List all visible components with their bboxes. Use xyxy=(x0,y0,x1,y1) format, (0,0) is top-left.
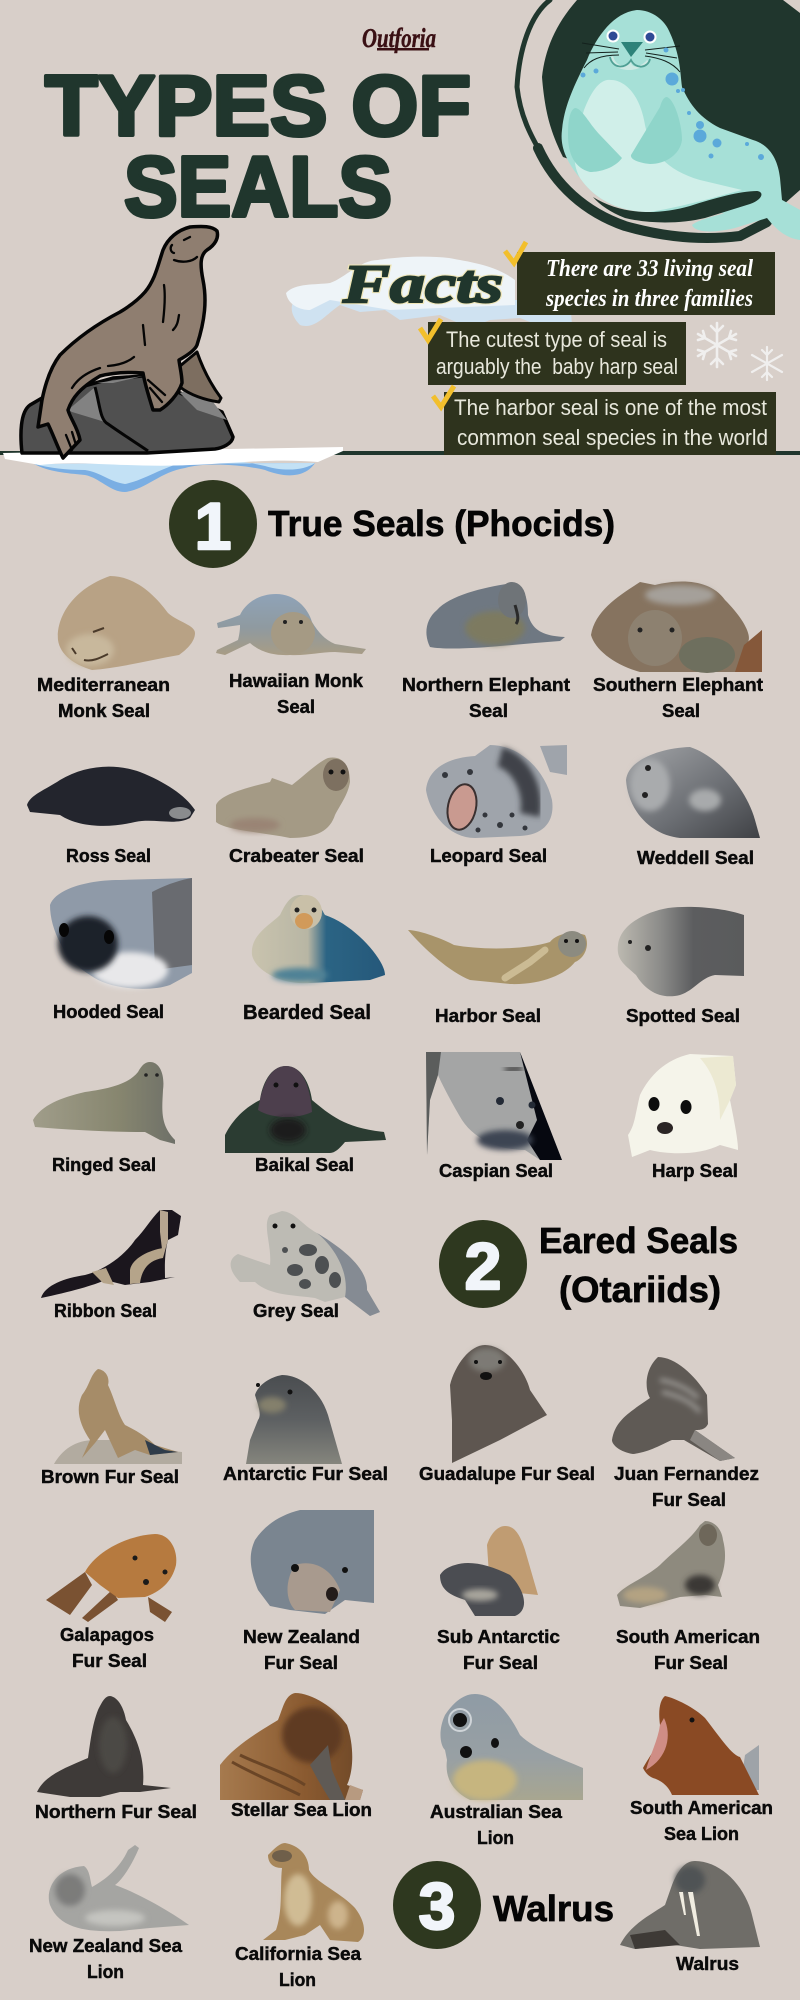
seal card: Ross Seal xyxy=(27,767,195,866)
icon: snowflake large xyxy=(698,323,736,367)
seal card: California Sea Lion xyxy=(235,1843,364,1990)
ice floe xyxy=(3,447,343,492)
back flipper xyxy=(180,352,221,402)
heading: Facts: Facts xyxy=(342,254,503,314)
ground line xyxy=(0,451,800,455)
photo xyxy=(426,745,567,838)
seal card: Galapagos Fur Seal xyxy=(46,1534,176,1671)
number badge: 1 xyxy=(195,489,231,563)
label: Hooded Seal xyxy=(53,1001,164,1022)
photo xyxy=(440,1694,583,1800)
number badge: 2 xyxy=(465,1229,501,1303)
title: TYPES OF xyxy=(45,59,471,154)
label: Ringed Seal xyxy=(52,1154,156,1175)
fact 2: The cutest type of seal is xyxy=(446,327,667,352)
fact 3: common seal species in the world xyxy=(457,425,768,450)
seal card: Harp Seal xyxy=(628,1054,738,1181)
seal card: Brown Fur Seal xyxy=(41,1369,182,1487)
label: Harp Seal xyxy=(652,1160,738,1181)
label xyxy=(60,1624,154,1671)
photo xyxy=(617,1521,725,1608)
label: Seal xyxy=(662,700,700,721)
label: Caspian Seal xyxy=(439,1160,553,1181)
seal belly xyxy=(574,80,742,212)
fact 3 xyxy=(433,386,776,455)
photo xyxy=(216,594,366,655)
fact 2: arguably the baby harp seal xyxy=(436,354,678,379)
number badge: 3 xyxy=(419,1869,455,1943)
label: Stellar Sea Lion xyxy=(231,1799,372,1820)
label: Spotted Seal xyxy=(626,1005,740,1026)
photo xyxy=(628,1054,738,1157)
photo xyxy=(58,576,195,670)
fact 1: There are 33 living seal xyxy=(546,256,753,282)
photo xyxy=(46,1534,176,1622)
seal card: Bearded Seal xyxy=(243,895,385,1024)
seal card: Hawaiian Monk Seal xyxy=(216,594,366,717)
seal card: Antarctic Fur Seal xyxy=(223,1375,388,1484)
check icon xyxy=(420,319,441,340)
label: Juan Fernandez xyxy=(614,1463,759,1484)
label: Seal xyxy=(469,700,508,721)
label: Brown Fur Seal xyxy=(41,1466,179,1487)
seal card: Weddell Seal xyxy=(626,747,760,868)
section heading 1: True Seals: True Seals (Phocids) xyxy=(268,503,615,544)
label xyxy=(430,1801,563,1848)
section heading 2: Eared Seals: (Otariids) xyxy=(559,1269,721,1310)
photo xyxy=(50,878,192,989)
section heading 3: Walrus xyxy=(393,1861,614,1949)
photo xyxy=(626,747,760,838)
section heading 3: Walrus: Walrus xyxy=(493,1888,614,1929)
label: Mediterranean xyxy=(37,674,170,695)
title xyxy=(45,59,471,235)
label: Lion xyxy=(477,1827,514,1848)
photo xyxy=(49,1845,189,1931)
label xyxy=(29,1935,183,1982)
section heading 2: Eared Seals: Eared Seals xyxy=(539,1220,738,1261)
seal card: South American Sea Lion xyxy=(630,1696,773,1844)
photo xyxy=(37,1696,171,1797)
seal card: Guadalupe Fur Seal xyxy=(419,1345,595,1484)
photo xyxy=(220,1693,363,1800)
label: Baikal Seal xyxy=(255,1154,354,1175)
seal card: Hooded Seal xyxy=(50,878,192,1022)
label: New Zealand xyxy=(243,1626,360,1647)
photo xyxy=(620,1861,760,1949)
heading: Facts: Facts xyxy=(342,254,503,314)
label: Australian Sea xyxy=(430,1801,563,1822)
label xyxy=(614,1463,759,1510)
label xyxy=(229,670,364,717)
label: Northern Fur Seal xyxy=(35,1801,197,1822)
photo xyxy=(231,1211,380,1316)
label: Antarctic Fur Seal xyxy=(223,1463,388,1484)
photo xyxy=(216,757,350,838)
label: Fur Seal xyxy=(463,1652,538,1673)
label: Fur Seal xyxy=(654,1652,728,1673)
label: Lion xyxy=(87,1961,124,1982)
label: New Zealand Sea xyxy=(29,1935,183,1956)
label xyxy=(616,1626,760,1673)
label: Weddell Seal xyxy=(637,847,754,868)
title: SEALS xyxy=(124,140,392,235)
photo xyxy=(246,1375,342,1464)
photo xyxy=(643,1696,759,1795)
fact 1: species in three families xyxy=(545,286,753,312)
label: Seal xyxy=(277,696,315,717)
photo xyxy=(618,907,744,996)
label: Monk Seal xyxy=(58,700,150,721)
seal card: Mediterranean Monk Seal xyxy=(37,576,195,721)
photo xyxy=(263,1843,364,1942)
seal card: Baikal Seal xyxy=(225,1066,386,1175)
dark band under belly xyxy=(593,191,761,222)
label: Northern Elephant xyxy=(402,674,570,695)
sea lion details xyxy=(66,237,197,450)
photo xyxy=(440,1526,538,1616)
seal card: Ribbon Seal xyxy=(41,1210,181,1321)
seal card: Stellar Sea Lion xyxy=(220,1693,372,1820)
seal flippers xyxy=(568,97,682,172)
label xyxy=(630,1797,773,1844)
photo xyxy=(591,582,762,673)
label: Galapagos xyxy=(60,1624,154,1645)
fact 2 xyxy=(420,319,686,385)
seal card: Crabeater Seal xyxy=(216,757,364,866)
label: Southern Elephant xyxy=(593,674,763,695)
photo xyxy=(41,1210,181,1298)
seal card: South American Fur Seal xyxy=(616,1521,760,1673)
photo xyxy=(251,1510,374,1614)
label: Sub Antarctic xyxy=(437,1626,560,1647)
check icon xyxy=(433,386,454,407)
label xyxy=(593,674,763,721)
seal spots xyxy=(580,48,764,160)
label: South American xyxy=(616,1626,760,1647)
icon: snowflake small xyxy=(752,347,782,380)
seal card: Southern Elephant Seal xyxy=(591,582,763,721)
label: Ross Seal xyxy=(66,845,151,866)
illustration: teal cartoon seal in dark brush circle xyxy=(517,0,800,240)
rock xyxy=(21,376,233,453)
photo xyxy=(252,895,385,983)
seal card: Leopard Seal xyxy=(426,745,567,866)
label: California Sea xyxy=(235,1943,362,1964)
photo xyxy=(426,582,565,649)
label xyxy=(402,674,570,721)
label: Fur Seal xyxy=(264,1652,338,1673)
logo: Outforia: Outforia xyxy=(362,23,436,53)
seal card: Harbor Seal xyxy=(408,930,587,1026)
seal card: Grey Seal xyxy=(231,1211,380,1321)
label: Ribbon Seal xyxy=(54,1300,157,1321)
photo xyxy=(408,930,587,984)
label: Fur Seal xyxy=(72,1650,147,1671)
number badge xyxy=(393,1861,481,1949)
seal card: New Zealand Fur Seal xyxy=(243,1510,374,1673)
label: Guadalupe Fur Seal xyxy=(419,1463,595,1484)
dark brush circle xyxy=(517,0,800,238)
number badge xyxy=(169,480,257,568)
photo xyxy=(426,1052,562,1160)
seal card: Ringed Seal xyxy=(33,1062,175,1175)
photo xyxy=(27,767,195,826)
seal card: Australian Sea Lion xyxy=(430,1694,583,1848)
check icon xyxy=(505,242,526,263)
label xyxy=(235,1943,362,1990)
seal card: Sub Antarctic Fur Seal xyxy=(437,1526,560,1673)
label: Harbor Seal xyxy=(435,1005,541,1026)
illustration: brown sea lion on rock and ice xyxy=(3,226,343,492)
label: Walrus xyxy=(676,1953,739,1974)
seal card: Northern Elephant Seal xyxy=(402,582,570,721)
label xyxy=(37,674,170,721)
label: Hawaiian Monk xyxy=(229,670,364,691)
label xyxy=(243,1626,360,1673)
photo xyxy=(612,1357,735,1461)
seal card: Spotted Seal xyxy=(618,907,744,1026)
number badge xyxy=(439,1220,527,1308)
label: Bearded Seal xyxy=(243,1002,371,1024)
sea lion body xyxy=(38,226,218,458)
seal card: New Zealand Sea Lion xyxy=(29,1845,189,1982)
label: Lion xyxy=(279,1969,316,1990)
photo xyxy=(450,1345,547,1463)
photo xyxy=(54,1369,182,1464)
fact 1 xyxy=(505,242,775,315)
seal card: Juan Fernandez Fur Seal xyxy=(612,1357,759,1510)
section heading 1: True Seals xyxy=(169,480,615,568)
seal card: Northern Fur Seal xyxy=(35,1696,197,1822)
photo xyxy=(33,1062,175,1144)
snow cloud behind Facts xyxy=(286,257,572,328)
label: Sea Lion xyxy=(664,1823,739,1844)
seal card: Caspian Seal xyxy=(426,1052,562,1181)
label: Crabeater Seal xyxy=(229,845,364,866)
seal face xyxy=(582,30,680,72)
section heading 2: Eared Seals xyxy=(439,1220,738,1310)
label: South American xyxy=(630,1797,773,1818)
label: Leopard Seal xyxy=(430,845,547,866)
tail fin xyxy=(692,200,800,240)
seal card: Walrus xyxy=(620,1861,760,1974)
seal body xyxy=(562,10,800,240)
label: Grey Seal xyxy=(253,1300,339,1321)
label: Fur Seal xyxy=(652,1489,726,1510)
photo xyxy=(225,1066,386,1153)
label xyxy=(437,1626,560,1673)
fact 3: The harbor seal is one of the most xyxy=(454,395,767,420)
